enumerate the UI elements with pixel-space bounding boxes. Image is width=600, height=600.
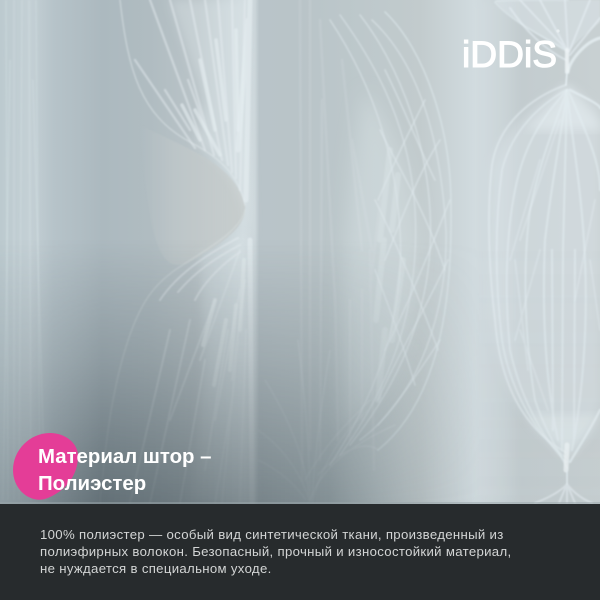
pattern: central oval of strands — [300, 0, 451, 500]
pattern: right column strands with pinch points — [489, 0, 600, 503]
heading: material: Материал штор – — [38, 446, 211, 468]
heading: material: Полиэстер — [38, 473, 146, 495]
body text: полиэфирных волокон. Безопасный, прочный и износостойкий материал, — [40, 544, 511, 559]
soft highlight on fold — [478, 0, 510, 504]
left fold streaks — [3, 0, 45, 500]
shadow: lower darkening — [0, 265, 464, 504]
pattern: lower fan at curtain hem — [258, 340, 368, 502]
heading: material — [38, 446, 211, 495]
badge: pink blob — [13, 433, 78, 500]
body text — [40, 527, 511, 576]
panel: description — [0, 504, 600, 600]
pattern: lens shape and feathers on left fold — [100, 0, 254, 503]
body text: 100% полиэстер — особый вид синтетической ткани, произведенный из — [40, 527, 504, 542]
body text: не нуждается в специальном уходе. — [40, 561, 272, 576]
